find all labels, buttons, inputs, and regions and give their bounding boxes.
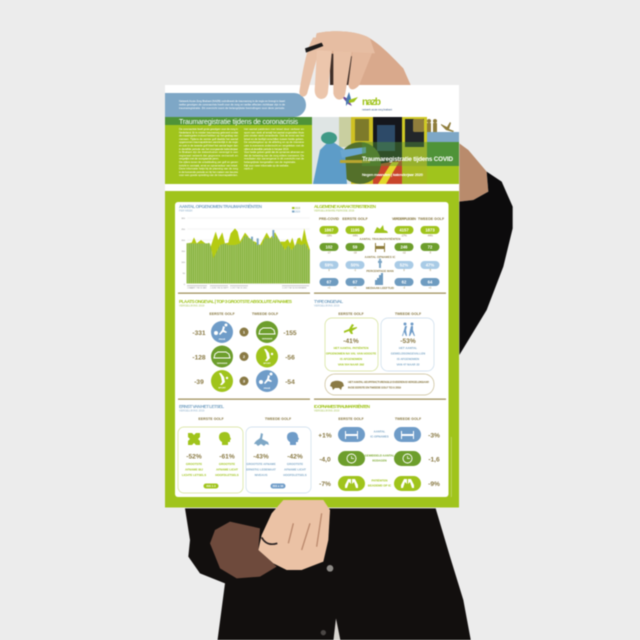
body text column 1: voor een goede spreiding van de traumapatiënten. <box>179 173 238 177</box>
row: percentage man: 0 <box>328 269 330 272</box>
row: aantal traumapatiënten: -44% <box>352 234 359 238</box>
card: eerste golf: -52% <box>186 454 202 460</box>
body text column 1: in dezelfde periode van het voorgaande kalenderjaar <box>179 147 238 151</box>
panel: ic-opnames traumapatiënten <box>314 403 440 491</box>
column heads: PRE-COVID <box>319 217 339 221</box>
card: tweede golf: -43% <box>253 454 269 460</box>
card: eerste golf <box>178 427 243 493</box>
card: tweede golf: GROOTSTE AFNAME <box>246 462 276 466</box>
card: tweede golf: -42% <box>287 454 303 460</box>
subheading: PER WEEK <box>179 208 193 212</box>
header blue intro pill <box>165 93 306 117</box>
header icons: suitcase, people, falling person <box>413 119 454 132</box>
row: aantal traumapatiënten: AANTAL TRAUMAPATIËNTEN <box>360 237 400 241</box>
card: tweede golf: HET AANTAL <box>399 346 417 350</box>
card: tweede golf <box>381 318 434 371</box>
panel: header green block <box>165 125 312 184</box>
body text column 2: belangrijkste kengetallen van de registratie. <box>244 160 296 164</box>
icon: sport: SPORT <box>263 363 271 365</box>
callout: heupfracturen: IN DE EERSTE EN TWEEDE GOLF T.O.V. 2019 <box>348 386 401 390</box>
body text column 2: dat de belasting van de zorg elders toeneemt. De <box>244 153 304 157</box>
card: eerste golf: ISS 1-3 <box>206 484 216 488</box>
chart y axis labels: 200 <box>181 240 186 242</box>
row: aantal spoedopnames: -12 <box>402 252 406 254</box>
heading: ALGEMENE KARAKTERISTIEKEN <box>314 204 377 209</box>
legend: 2020 <box>295 212 301 214</box>
row: aantal traumapatiënten: 1867 <box>324 228 334 232</box>
card: eerste golf: -61% <box>219 454 235 460</box>
header dark green title band <box>165 117 312 125</box>
chart gridlines <box>187 218 310 284</box>
logo: nazb <box>343 92 392 112</box>
row: aantal ic-opnames: IC-OPNAMES <box>370 434 389 438</box>
card: tweede golf: HOOFDLETSELS <box>283 473 307 477</box>
card: tweede golf: NIVEAUS <box>255 473 267 477</box>
row: aantal ic-opnames: -3% <box>428 432 440 440</box>
row: mediaan leeftijd: 67 <box>327 280 332 284</box>
body text column 1: In Brabant zijn de ziekenhuizen verenigd in een <box>179 150 238 154</box>
rank badges: 2 <box>243 354 246 359</box>
row: aantal spoedopnames: 72 <box>428 244 433 250</box>
row: beademing: PATIËNTEN <box>372 478 387 482</box>
divider <box>178 292 310 294</box>
body text column 2: Het aantal patiënten met letsel door verkeer en <box>244 127 304 131</box>
row: aantal ic-opnames <box>318 427 440 442</box>
subheading: VERGELIJKING 2019 <box>179 408 205 412</box>
legend <box>292 207 301 214</box>
column heads <box>319 217 445 221</box>
body text column 2 <box>243 127 305 171</box>
column heads <box>209 312 279 316</box>
row: aantal spoedopnames: 59 <box>353 244 358 250</box>
row: mediaan leeftijd: +1 <box>429 286 432 290</box>
column heads: VERDERPLEGEN <box>392 217 416 221</box>
body text column 2: cijfers uit dezelfde periode in het jaar 2019. <box>244 147 289 151</box>
row: mediaan leeftijd: MEDIAAN LEEFTIJD <box>366 286 394 290</box>
divider <box>314 292 446 294</box>
row: mediaan leeftijd: +1 <box>328 286 331 290</box>
heading: ERNST VAN HET LETSEL <box>179 404 224 409</box>
row: aantal traumapatiënten: 1873 <box>425 228 435 232</box>
card: tweede golf: ISS ≥ 16 <box>273 484 284 488</box>
body text column 1: mensen. Tijdens de eerste golf daalde het aantal <box>179 137 238 141</box>
card: eerste golf: GROOTSTE <box>186 462 202 466</box>
column heads <box>198 417 292 421</box>
chart period labels: 1 MAART T/M 31 MEI <box>187 286 207 290</box>
body text column 2: care is eveneens onderzocht en vergeleken met de <box>244 144 304 148</box>
row: aantal spoedopnames <box>320 243 440 259</box>
row: percentage man: 50% <box>351 262 359 268</box>
body text column 1: inzicht in oorzaak, ernst en opnameduur van letsel. <box>179 163 238 167</box>
panel: algemene karakteristieken <box>314 204 445 290</box>
card: tweede golf: GROOTSTE <box>287 462 303 466</box>
header period line: Negen maanden | kalenderjaar 2020 <box>362 172 424 177</box>
body text column 2: juist minder sterk veranderde. Ook de ernst van het <box>243 134 304 138</box>
chart y axis labels: 0 <box>184 284 186 286</box>
heading: IC-OPNAMES TRAUMAPATIËNTEN <box>314 403 371 409</box>
person: shirt torso and sleeve <box>185 508 472 640</box>
card: eerste golf: OPGENOMEN NA VAL VAN HOOGTE <box>326 352 376 356</box>
card: eerste golf: AFNAME LICHT <box>216 468 238 472</box>
row: aantal traumapatiënten <box>320 225 440 241</box>
row: beademing: -9% <box>428 481 440 488</box>
row: percentage man: PERCENTAGE MAN <box>366 269 394 273</box>
card: eerste golf <box>325 318 378 371</box>
row: percentage man: 52% <box>400 262 408 268</box>
left values: -39 <box>194 379 204 386</box>
logo: nazb: nazb <box>362 97 381 108</box>
row: ligduur <box>319 451 440 466</box>
card: tweede golf: ERNSTIG LEDEMAAT <box>246 468 276 472</box>
panel: aantal opgenomen traumapatiënten <box>179 203 310 290</box>
poster sheet <box>165 85 459 508</box>
row: mediaan leeftijd: 64 <box>428 280 433 284</box>
row: beademing: BEADEMD OP IC <box>368 484 392 488</box>
body text column 1: De cijfers tonen de ontwikkeling per golf en geven <box>179 160 238 164</box>
row: ligduur: GEMIDDELD AANTAL <box>365 454 395 458</box>
chart y axis labels: 150 <box>181 251 186 253</box>
green field <box>165 191 459 508</box>
row: ligduur: -4,0 <box>319 456 331 464</box>
column heads: EERSTE GOLF <box>338 417 364 421</box>
right values <box>283 330 297 386</box>
body text column 1: en ook in de tweede golf bleef het aantal lager dan <box>179 144 238 148</box>
body text column 2: De verpleegduur op de afdeling en op de intensive <box>244 140 304 144</box>
left values: -331 <box>192 330 206 337</box>
column heads: TWEEDE GOLF <box>265 417 292 421</box>
body text column 1: de maatregelen invloed hebben op het gedrag van <box>179 134 238 138</box>
body text column 2: Kijk voor meer informatie op de website. <box>244 163 289 167</box>
row: percentage man: 0 <box>403 269 405 272</box>
intro text: Netwerk Acute Zorg Brabant (NAZB) coördineert de traumazorg in de regio en brengt in kaart <box>179 99 285 103</box>
row: ligduur: IIGDAGEN <box>372 458 387 462</box>
card: eerste golf: -41% <box>343 338 359 345</box>
body text column 2: letsel en de leeftijd verschillen tussen beide golven. <box>244 137 304 141</box>
chart y axis labels: 100 <box>181 262 186 264</box>
chart period labels: 1 OKT T/M 30 NOVEMBER <box>282 288 307 290</box>
intro text: welke gevolgen de coronacrisis heeft voor de zorg en welke effecten zichtbaar zijn in de <box>179 102 286 106</box>
body text column 1: vergelijkt met de voorgaande jaren. <box>179 157 219 161</box>
row: aantal traumapatiënten: -33% <box>326 234 333 238</box>
panel: type ongeval <box>314 299 434 395</box>
row: aantal spoedopnames: 102 <box>326 244 333 250</box>
body text column 1: regionaal netwerk dat gegevens verzamelt en <box>179 153 238 157</box>
chart period labels: 1 OKT T/M 31 DEC <box>230 288 248 290</box>
header subtitle: Traumaregistratie tijdens COVID <box>362 156 453 163</box>
callout: heupfracturen: HET AANTAL HEUPFRACTUREN BLIJ OUDEREN IS VERGELIJKBAAR <box>348 380 430 384</box>
vertical credit line <box>450 437 453 497</box>
icon: privé: PRIVÉ <box>219 338 226 341</box>
card: tweede golf: -53% <box>400 338 416 345</box>
column heads: EERSTE GOLF <box>342 217 368 221</box>
card: eerste golf: LICHTE LETSELS <box>182 473 206 477</box>
poster <box>165 85 459 508</box>
row: aantal traumapatiënten: 4157 <box>399 228 409 232</box>
body text column 2: nazb.nl <box>244 167 253 171</box>
white content panel <box>175 202 448 497</box>
row: beademing: -7% <box>319 481 331 488</box>
row: aantal ic-opnames: AANTAL <box>374 430 386 434</box>
body text column 1: opgenomen traumapatiënten aanzienlijk in de regio <box>179 140 238 144</box>
row: aantal spoedopnames: -10 <box>353 252 357 254</box>
row: aantal spoedopnames: AANTAL OPNAMES IC <box>365 255 396 259</box>
column heads: EERSTE GOLF <box>338 312 364 316</box>
row: aantal traumapatiënten: 1195 <box>350 228 360 232</box>
chart period labels <box>187 286 309 290</box>
rank badges <box>240 328 248 386</box>
left values: -128 <box>192 354 206 362</box>
row: aantal ic-opnames: +1% <box>318 432 332 440</box>
row: beademing <box>319 476 440 491</box>
subheading: VERGELIJKBARE PERIODE 2019 <box>314 208 355 212</box>
subheading: VERGELIJKING 2019 <box>314 408 340 412</box>
intro text <box>179 99 286 110</box>
chart y axis labels: 250 <box>181 229 186 231</box>
right values: -155 <box>283 330 297 337</box>
row: aantal spoedopnames: -5 <box>429 252 432 254</box>
body text column 1: De coronacrisis heeft grote gevolgen voor de zorg in <box>179 127 238 131</box>
row: mediaan leeftijd: 67 <box>353 280 358 284</box>
card: eerste golf: VAN 504 NAAR 292 <box>338 362 365 366</box>
row: aantal spoedopnames: 246 <box>400 244 408 250</box>
card: tweede golf <box>246 427 311 493</box>
icon: verkeer: VERKEER <box>262 338 273 340</box>
row: mediaan leeftijd <box>320 273 440 290</box>
row: percentage man <box>320 258 440 273</box>
person: right arm and sleeve <box>459 143 513 355</box>
column heads: TWEEDE GOLF <box>418 217 445 221</box>
chart period labels: 1 JUNI T/M 30 SEPT <box>210 288 229 290</box>
card: eerste golf: AFNAME BIJ <box>185 468 203 472</box>
chart y axis labels: 300 <box>181 218 186 220</box>
left values <box>192 330 206 386</box>
body text column 1: Nederland. Er is minder traumazorg geleverd omdat <box>179 130 238 134</box>
subheading: VERGELIJKING 2019 <box>179 304 205 308</box>
row: percentage man: -1 <box>354 269 357 272</box>
panel: plaats ongeval <box>179 299 297 392</box>
column heads: TWEEDE GOLF <box>395 417 422 421</box>
card: eerste golf: HOOFDLETSELS <box>215 473 239 477</box>
row: percentage man: 59% <box>325 262 333 268</box>
row: mediaan leeftijd: +1 <box>354 286 357 290</box>
body text column 2: resultaten zijn samengevat in dit overzicht met de <box>244 157 304 161</box>
heading: AANTAL OPGENOMEN TRAUMAPATIËNTEN <box>179 203 263 209</box>
card: eerste golf: HET AANTAL PATIËNTEN <box>334 346 368 350</box>
column heads <box>338 417 422 421</box>
card: tweede golf: VAN 47 NAAR 22 <box>396 362 420 366</box>
rank badges: 1 <box>243 330 246 334</box>
icon: privé: PRIVÉ <box>264 387 271 390</box>
row: mediaan leeftijd: 62 <box>402 280 407 284</box>
body text column 2: Voor beide golven geldt dat de opnames afnemen en <box>244 150 304 154</box>
card: eerste golf: GROOTSTE <box>219 462 235 466</box>
card: tweede golf: GEWELDSONGEVALLEN <box>391 352 425 356</box>
rank badges: 3 <box>243 378 246 384</box>
column heads: EERSTE GOLF <box>209 312 235 316</box>
chart y axis labels <box>181 218 186 286</box>
callout: heupfracturen <box>325 374 434 395</box>
title: Traumaregistratie tijdens de coronacrisis <box>179 119 298 126</box>
right values: -56 <box>285 354 295 362</box>
body text column 1: in de komende periode en bij het maken van keuzes <box>179 170 239 174</box>
divider <box>314 398 446 400</box>
card: tweede golf: AFNAME LICHT <box>284 468 306 472</box>
chart y axis labels: 50 <box>183 273 186 275</box>
card: eerste golf: IS AFGENOMEN <box>340 357 362 361</box>
card: tweede golf: IS AFGENOMEN <box>397 357 419 361</box>
panel: ernst van het letsel <box>178 404 311 493</box>
row: percentage man: 47% <box>426 262 434 268</box>
column heads: TWEEDE GOLF <box>252 312 279 316</box>
row: percentage man: -5 <box>429 269 432 272</box>
header photo: ambulance and nurse <box>312 117 459 184</box>
column heads: TWEEDE GOLF <box>395 312 422 316</box>
right values: -54 <box>285 379 295 386</box>
body text column 1: Deze informatie helpt bij de planning van de zorg <box>179 167 238 171</box>
body text column 1 <box>179 127 239 177</box>
heading: TYPE ONGEVAL <box>314 299 343 304</box>
subheading: VERGELIJKING 2019 <box>314 304 340 308</box>
person: bottom hand and forearm <box>210 500 330 578</box>
intro text: traumaregistratie. Dit overzicht toont de belangrijkste bevindingen voor deze periode. <box>179 106 285 110</box>
row: mediaan leeftijd: -2 <box>403 286 406 290</box>
chart area and bars <box>187 228 310 283</box>
column heads: EERSTE GOLF <box>198 417 224 421</box>
icon: verkeer: VERKEER <box>217 363 228 365</box>
legend: 2019 <box>295 208 301 210</box>
row: aantal traumapatiënten: -44% <box>427 234 434 238</box>
heading: PLAATS ONGEVAL | TOP 3 GROOTSTE ABSOLUTE AFNAMES <box>179 299 292 304</box>
icon: sport: SPORT <box>218 388 226 390</box>
person: top hand holding poster <box>299 31 411 100</box>
logo: nazb: netwerk acute zorg brabant <box>362 108 392 112</box>
column heads <box>338 312 422 316</box>
divider <box>178 398 310 400</box>
row: aantal spoedopnames: -17 <box>327 252 331 254</box>
body text column 2: sport nam sterk af terwijl het aantal ongevallen thuis <box>244 130 305 134</box>
row: ligduur: -1,6 <box>428 456 440 464</box>
row: aantal traumapatiënten: -27% <box>401 234 408 238</box>
